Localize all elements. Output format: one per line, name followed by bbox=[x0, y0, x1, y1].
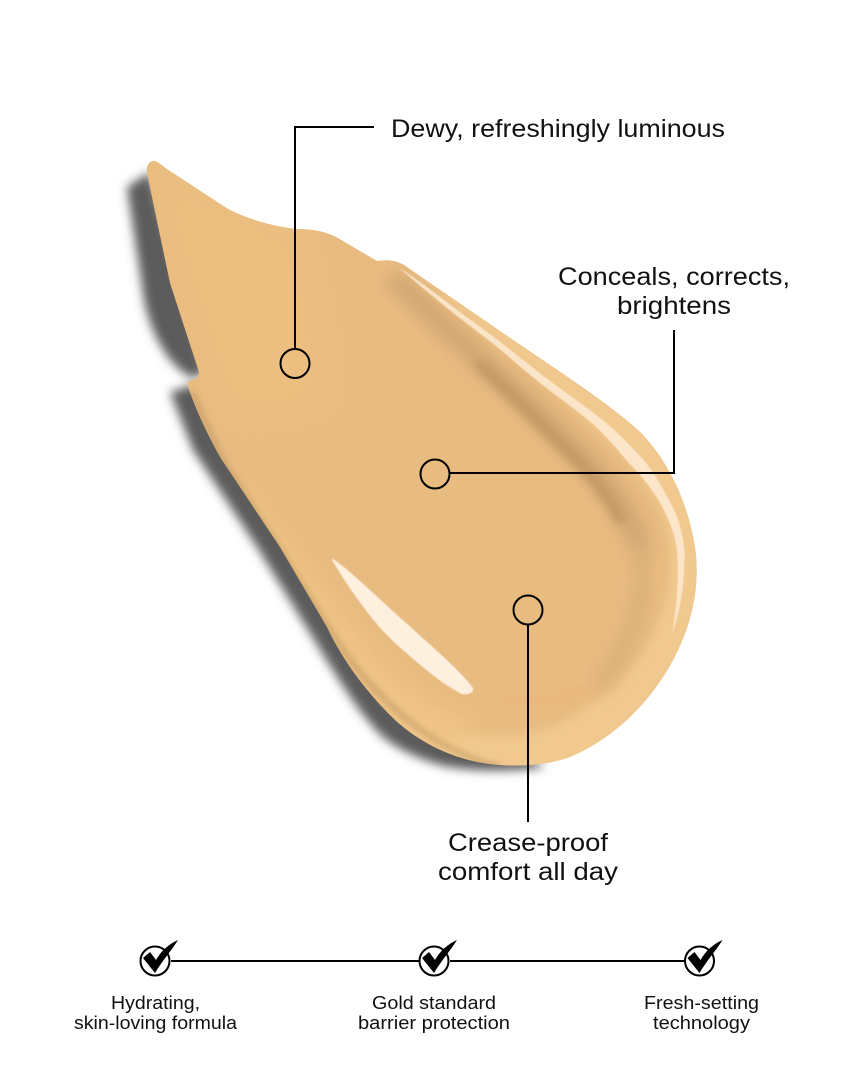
icon: check 2 bbox=[420, 940, 457, 976]
callout: conceals bbox=[420, 263, 790, 488]
marker: dewy bbox=[280, 349, 310, 378]
faint crease band lower bbox=[600, 555, 643, 685]
benefits row bbox=[74, 940, 759, 1033]
lower left rim glow bbox=[248, 498, 438, 749]
dark lower-left edge bbox=[192, 392, 500, 767]
label: crease-proof: Crease-proof bbox=[448, 829, 608, 857]
icon: check 3 bbox=[685, 940, 722, 976]
leader line: conceals bbox=[450, 330, 674, 473]
infographic canvas bbox=[74, 119, 788, 1033]
callout: dewy bbox=[280, 115, 725, 378]
timeline connector bbox=[171, 960, 685, 962]
marker: conceals bbox=[420, 460, 450, 488]
lighter rim along right edge bbox=[375, 258, 702, 772]
leader line: crease-proof bbox=[527, 625, 529, 822]
benefit text 2 bbox=[358, 993, 510, 1033]
deeper crease core bbox=[480, 365, 620, 520]
leader line: dewy bbox=[295, 127, 374, 349]
highlight lower left bbox=[332, 559, 473, 694]
benefit text 2: barrier protection bbox=[358, 1013, 510, 1033]
label: dewy: Dewy, refreshingly luminous bbox=[391, 115, 725, 143]
benefit text 1: Hydrating, bbox=[111, 993, 200, 1013]
warm patch near bottom bbox=[505, 688, 585, 701]
marker: crease-proof bbox=[514, 596, 542, 624]
label: conceals: Conceals, corrects, bbox=[558, 263, 790, 291]
dark crease band upper bbox=[398, 282, 640, 545]
drop shadow of swatch bbox=[127, 172, 545, 771]
foundation swatch bbox=[130, 150, 710, 780]
benefit text 2: Gold standard bbox=[372, 993, 496, 1013]
benefit text 3: technology bbox=[653, 1013, 750, 1033]
label: crease-proof bbox=[438, 829, 619, 886]
swatch base bbox=[130, 150, 710, 780]
icon: check 1 bbox=[140, 940, 178, 976]
benefit text 3 bbox=[644, 993, 759, 1033]
callout: crease-proof bbox=[438, 596, 619, 886]
benefit text 1: skin-loving formula bbox=[74, 1013, 238, 1033]
label: conceals bbox=[558, 263, 790, 320]
highlight upper and right edge bbox=[397, 266, 685, 634]
benefit text 1 bbox=[74, 993, 238, 1033]
label: conceals: brightens bbox=[617, 292, 731, 320]
label: crease-proof: comfort all day bbox=[438, 858, 619, 886]
lighter left body bbox=[150, 172, 294, 358]
benefit text 3: Fresh-setting bbox=[644, 993, 759, 1013]
